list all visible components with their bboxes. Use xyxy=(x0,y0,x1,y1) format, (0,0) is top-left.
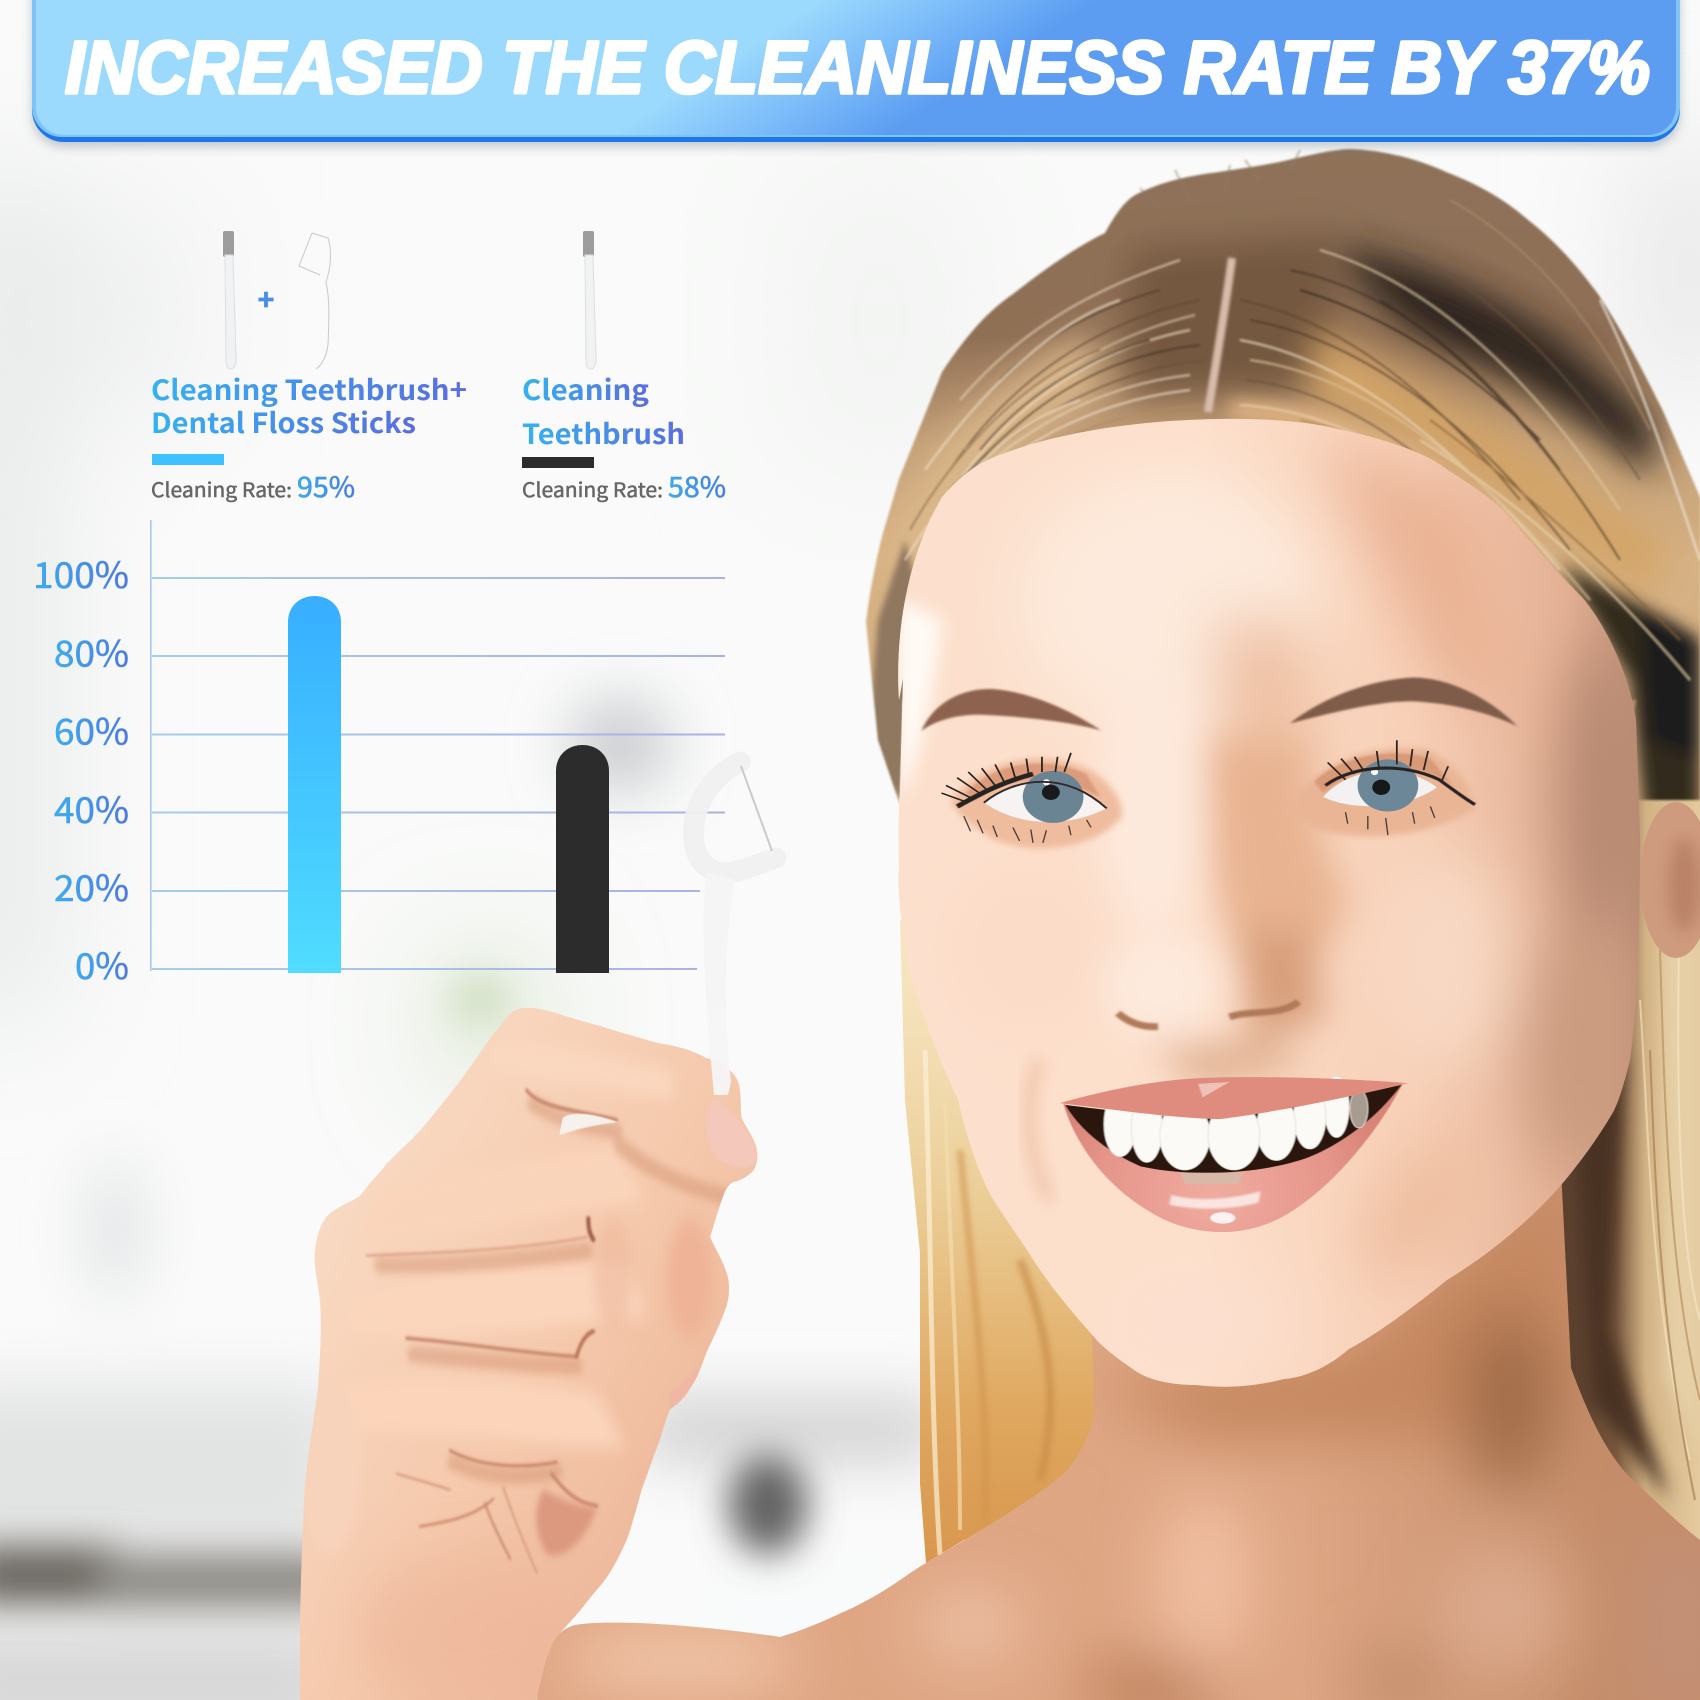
right eyebrow xyxy=(1290,678,1517,726)
axis labels: 60% xyxy=(54,704,129,756)
chart xyxy=(33,520,725,990)
axis labels: 20% xyxy=(54,860,129,912)
left eyebrow xyxy=(921,689,1101,731)
title banner xyxy=(32,0,1680,142)
soft finger volumes xyxy=(300,1040,713,1554)
hand holding floss pick xyxy=(280,980,780,1700)
face xyxy=(880,400,1660,1400)
palm hollow xyxy=(536,1490,597,1556)
legend text: combined: Cleaning Teethbrush+ xyxy=(151,369,467,409)
grid lines xyxy=(152,578,725,969)
plus sign: + xyxy=(258,279,274,319)
lower lip xyxy=(1063,1084,1403,1232)
cleaning rate 95 percent xyxy=(151,466,355,506)
cleaning rate 58 percent xyxy=(522,466,726,506)
axis labels: 40% xyxy=(54,782,129,834)
legend text: toothbrush xyxy=(522,369,685,453)
soft palm shade xyxy=(357,1554,577,1700)
floss pick held in fingers xyxy=(693,762,776,1095)
legend text: toothbrush: Cleaning xyxy=(522,369,649,409)
axis labels: 0% xyxy=(75,938,129,990)
legend swatch black xyxy=(522,457,594,468)
icon: toothbrush xyxy=(223,231,236,369)
facial features xyxy=(921,678,1517,1232)
finger creases xyxy=(367,1090,617,1572)
nose shadow xyxy=(1210,740,1350,960)
left hair xyxy=(900,920,1130,1563)
icon: toothbrush right xyxy=(583,231,596,369)
index fingernail xyxy=(706,1098,757,1168)
axis labels: 100% xyxy=(33,547,129,599)
cleaning rate 58 percent: 58% xyxy=(668,466,726,506)
tuft of flyaway hair xyxy=(1140,150,1300,210)
ear xyxy=(1640,802,1700,958)
dark wedge of hair xyxy=(1330,245,1655,480)
legend swatch blue xyxy=(152,454,224,465)
hair strands xyxy=(905,200,1700,680)
cleaning rate 58 percent: Cleaning Rate: xyxy=(522,474,663,503)
lower finger nail edge xyxy=(670,1361,703,1407)
crown of hair xyxy=(850,140,1700,820)
cleaning rate 95 percent: Cleaning Rate: xyxy=(151,474,292,503)
upper nose shadow xyxy=(1215,620,1320,780)
neck and shoulders xyxy=(530,1150,1700,1700)
axis line xyxy=(150,520,152,971)
bar: toothbrush only 58% xyxy=(556,745,609,973)
mouth xyxy=(1060,1076,1408,1232)
cleaning rate 95 percent: 95% xyxy=(297,466,355,506)
upper lip xyxy=(1060,1077,1408,1119)
teeth xyxy=(1104,1076,1368,1170)
lower teeth xyxy=(1180,1173,1243,1184)
right eye xyxy=(1290,740,1475,836)
hair: back and crown xyxy=(850,140,1700,1620)
icon: floss stick xyxy=(299,233,330,369)
bar: toothbrush plus floss 95% xyxy=(288,596,341,973)
lip highlights xyxy=(1169,1191,1261,1209)
left eye xyxy=(942,753,1122,848)
axis labels xyxy=(33,547,129,990)
legend text: toothbrush: Teethbrush xyxy=(522,413,685,453)
golden sweep of hair xyxy=(1310,330,1668,600)
nostrils xyxy=(1118,1002,1299,1027)
legend text: combined: Dental Floss Sticks xyxy=(151,402,416,442)
axis labels: 80% xyxy=(54,626,129,678)
legend xyxy=(151,231,726,506)
hair parting xyxy=(1208,258,1232,412)
title: INCREASED THE CLEANLINESS RATE BY 37% xyxy=(65,26,1650,109)
right hair xyxy=(1540,497,1700,1620)
smile fold xyxy=(1029,1060,1050,1200)
legend text: combined xyxy=(151,369,467,442)
white temple highlight xyxy=(896,600,942,800)
mouth interior xyxy=(1065,1085,1402,1173)
soft shadow bands under fingers xyxy=(380,1104,723,1476)
gap between index and middle finger xyxy=(559,1114,618,1135)
